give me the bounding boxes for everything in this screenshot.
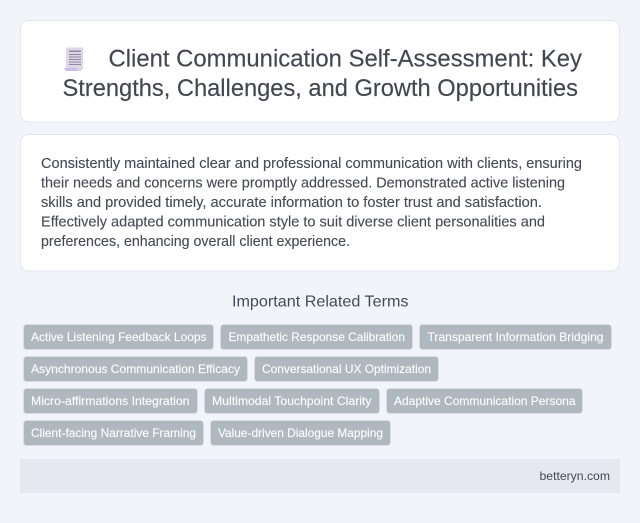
- chip: Active Listening Feedback Loops: [31, 330, 206, 344]
- text block: summary: Effectively adapted communication style to suit diverse client personalities and: [41, 215, 545, 231]
- chip: [204, 388, 380, 414]
- chip: Empathetic Response Calibration: [228, 330, 405, 344]
- text block: summary: skills and provided timely, accurate information to foster trust and satisfaction.: [41, 195, 542, 211]
- footer bar: [20, 459, 620, 493]
- chip: Multimodal Touchpoint Clarity: [212, 394, 372, 408]
- text block: summary: [41, 156, 582, 250]
- chip: [24, 388, 198, 414]
- chip: [24, 324, 214, 350]
- chip: Value-driven Dialogue Mapping: [218, 426, 383, 440]
- chip: [24, 356, 248, 382]
- icon: document scroll: [64, 48, 83, 71]
- chip: [210, 420, 390, 446]
- chip: [24, 420, 204, 446]
- chip: Client-facing Narrative Framing: [31, 426, 196, 440]
- title: Strengths, Challenges, and Growth Opportunities: [62, 75, 578, 102]
- text block: summary: their needs and concerns were promptly addressed. Demonstrated active listening: [41, 176, 565, 192]
- text block: summary: preferences, enhancing overall client experience.: [41, 234, 350, 250]
- panel: term chips: [24, 324, 612, 446]
- footer: site name: betteryn.com: [540, 469, 610, 483]
- panel: summary text: [20, 134, 620, 271]
- chip: [386, 388, 582, 414]
- heading: related terms: Important Related Terms: [232, 294, 408, 311]
- chip: [420, 324, 612, 350]
- panel: header: [20, 20, 620, 122]
- chip: [220, 324, 412, 350]
- chip: Adaptive Communication Persona: [394, 394, 576, 408]
- text block: summary: Consistently maintained clear and professional communication with clients, ensuring: [41, 156, 582, 172]
- title: Client Communication Self-Assessment: Key: [108, 46, 582, 73]
- chip: Micro-affirmations Integration: [31, 394, 190, 408]
- chip: Asynchronous Communication Efficacy: [31, 362, 240, 376]
- chip: Conversational UX Optimization: [262, 362, 431, 376]
- chip: [254, 356, 438, 382]
- title: [62, 46, 582, 102]
- chip: Transparent Information Bridging: [428, 330, 604, 344]
